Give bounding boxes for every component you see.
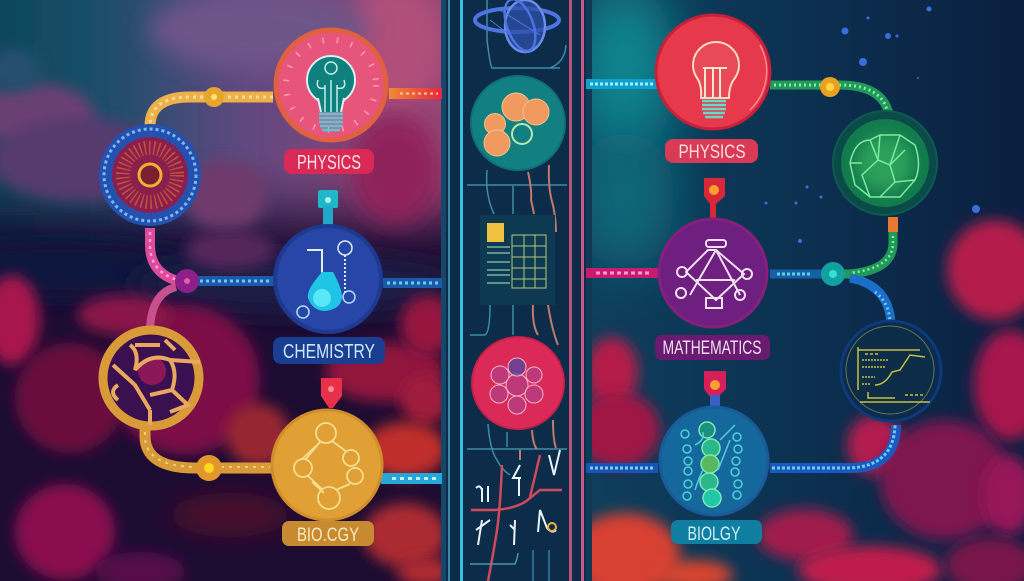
icon: sun node — [99, 124, 201, 226]
connector: green node to graph node — [770, 217, 893, 322]
star field — [764, 6, 980, 243]
connector: physics to node — [150, 87, 273, 126]
label: physics left: PHYSICS — [297, 152, 361, 174]
panel: right background — [570, 0, 1024, 581]
connector: chemistry pin — [318, 190, 338, 226]
connector: blue to biology — [586, 463, 658, 473]
icon: red cell disc — [472, 337, 564, 429]
connector: right strip to physics — [586, 79, 658, 89]
connector: gold node to biology — [145, 428, 272, 481]
connector: mathematics pin — [704, 178, 725, 218]
data card — [480, 215, 555, 305]
icon: biology right — [660, 407, 768, 515]
panel: central strip — [441, 0, 592, 581]
math sketches — [470, 450, 562, 581]
connector: physics to strip — [389, 88, 442, 99]
icon: gold network node — [103, 330, 200, 426]
icon: biology left — [272, 410, 382, 520]
connector: biology to strip — [381, 473, 442, 484]
label: biology right — [671, 520, 762, 545]
icon: atom — [475, 0, 559, 55]
icon: teal cell disc — [471, 76, 565, 170]
panel: left background — [0, 0, 441, 581]
connector: sun node to chemistry — [150, 228, 274, 328]
connector: biology to graph node — [770, 425, 896, 468]
label: biology right: BIOLGY — [688, 524, 741, 545]
icon: green node — [833, 111, 937, 215]
label: chemistry: CHEMISTRY — [283, 341, 375, 363]
icon: mathematics — [659, 219, 767, 327]
icon: physics left — [276, 30, 386, 140]
icon: physics right — [656, 15, 770, 129]
label: chemistry — [273, 337, 385, 364]
connector: physics to green node — [770, 77, 889, 114]
label: biology left: BIO.CGY — [297, 525, 359, 546]
icon: graph node — [841, 321, 941, 421]
label: physics left — [284, 149, 374, 174]
connector: biology pin left — [321, 378, 342, 408]
connector: biology pin right — [704, 371, 726, 407]
label: mathematics: MATHEMATICS — [662, 338, 762, 359]
connector: chemistry to strip — [383, 278, 442, 288]
label: mathematics — [655, 335, 770, 360]
connector: pink to mathematics — [586, 268, 658, 278]
icon: chemistry flask — [275, 226, 381, 332]
label: biology left — [282, 521, 374, 546]
label: physics right: PHYSICS — [678, 142, 746, 163]
